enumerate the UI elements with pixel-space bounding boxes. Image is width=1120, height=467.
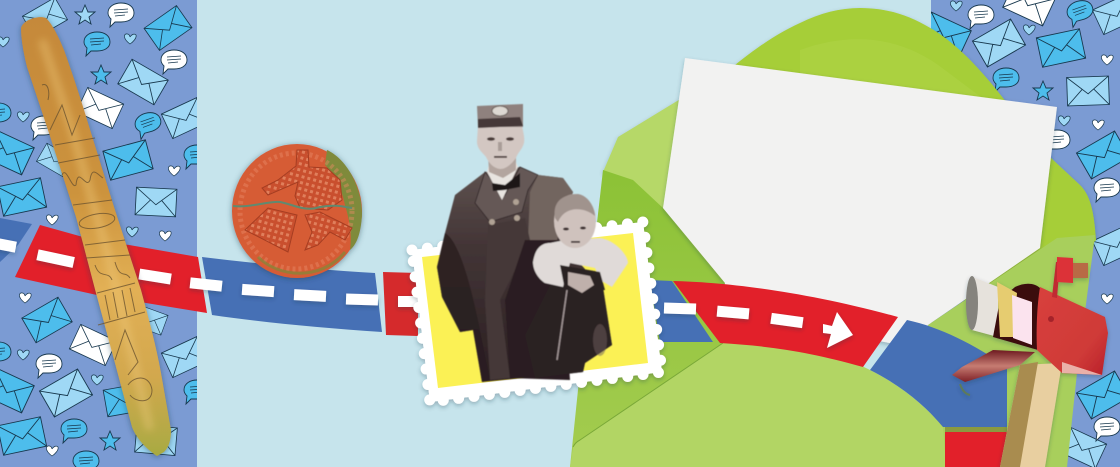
carrier neck (488, 155, 516, 178)
fold line (573, 343, 723, 447)
flag hinge (1048, 316, 1054, 322)
envelope top flap (700, 8, 1096, 300)
baby face (563, 226, 586, 243)
cap band (478, 117, 523, 128)
envelope right panel (928, 235, 1095, 467)
envelope body (570, 170, 790, 467)
mailbox underside highlight (1062, 362, 1102, 375)
seal crack (233, 202, 352, 209)
panel: left mail pattern (0, 0, 210, 467)
photo: mail carrier holding baby (437, 104, 628, 382)
newspaper roll (966, 276, 978, 330)
newspaper (972, 277, 998, 337)
baby blouse (533, 238, 628, 287)
seal knight figure (245, 150, 352, 252)
mailbox flag (1057, 257, 1073, 283)
stick highlight (42, 40, 150, 430)
wax seal (232, 144, 362, 278)
stamp yellow field (422, 233, 648, 388)
baby hair (555, 194, 595, 222)
coat front (485, 218, 530, 380)
envelope (570, 8, 1096, 467)
mailbox door (952, 350, 1035, 382)
road segment blue middle (202, 257, 382, 332)
road dashes (0, 236, 804, 328)
sheet of paper (663, 58, 1057, 345)
baby dress sheen (593, 324, 607, 356)
carrier cap (477, 104, 523, 127)
road end edge (945, 427, 1007, 432)
baby dress highlight (557, 290, 567, 360)
bone tally stick (21, 17, 171, 456)
cap badge (492, 106, 508, 116)
coat lapels (475, 167, 538, 222)
white letter (1012, 295, 1032, 345)
seal disc (232, 144, 362, 278)
road segment blue right of stamp (650, 280, 713, 342)
panel: right mail pattern (919, 0, 1120, 467)
baby hand (568, 272, 594, 293)
mailbox body (1037, 287, 1108, 375)
carrier head (477, 125, 524, 169)
dark under baby (505, 240, 570, 380)
mailbox opening (993, 284, 1040, 350)
envelope bottom flap (570, 343, 946, 467)
carrier bow tie (492, 173, 520, 191)
door handle (960, 384, 970, 395)
stick body (21, 17, 171, 456)
road segment red left (15, 225, 207, 313)
envelope left flap (603, 98, 682, 212)
baby head (554, 194, 596, 248)
road segment blue curve (870, 320, 1007, 427)
mailbox flag pole (1052, 262, 1060, 298)
road segment red end (945, 432, 1010, 467)
envelope inner flap shading (800, 39, 985, 100)
yellow letter (997, 282, 1017, 337)
road segment blue start (0, 218, 32, 262)
seal rim ring (240, 153, 352, 269)
road segment red right (673, 281, 898, 367)
upper arm light (528, 175, 573, 240)
road segment red middle (383, 272, 418, 336)
stamp body (412, 222, 662, 402)
seal green patch (325, 150, 362, 250)
shirt collar (487, 160, 518, 200)
stamp perforated edge (412, 222, 662, 402)
left sleeve dark (437, 233, 490, 382)
baby dress (525, 275, 612, 378)
post shadow side (1000, 362, 1038, 467)
arrow (823, 312, 853, 348)
mailbox (952, 257, 1108, 467)
dark band behind hand (560, 265, 605, 290)
face features (487, 137, 514, 158)
road path (0, 218, 1010, 467)
carrier coat (437, 167, 612, 382)
seal lower rim (258, 252, 345, 273)
mailbox post (1000, 363, 1062, 467)
postage stamp (412, 222, 662, 402)
stick carvings (42, 84, 152, 401)
coat buttons (489, 199, 520, 225)
flag shadow block (1073, 263, 1088, 278)
